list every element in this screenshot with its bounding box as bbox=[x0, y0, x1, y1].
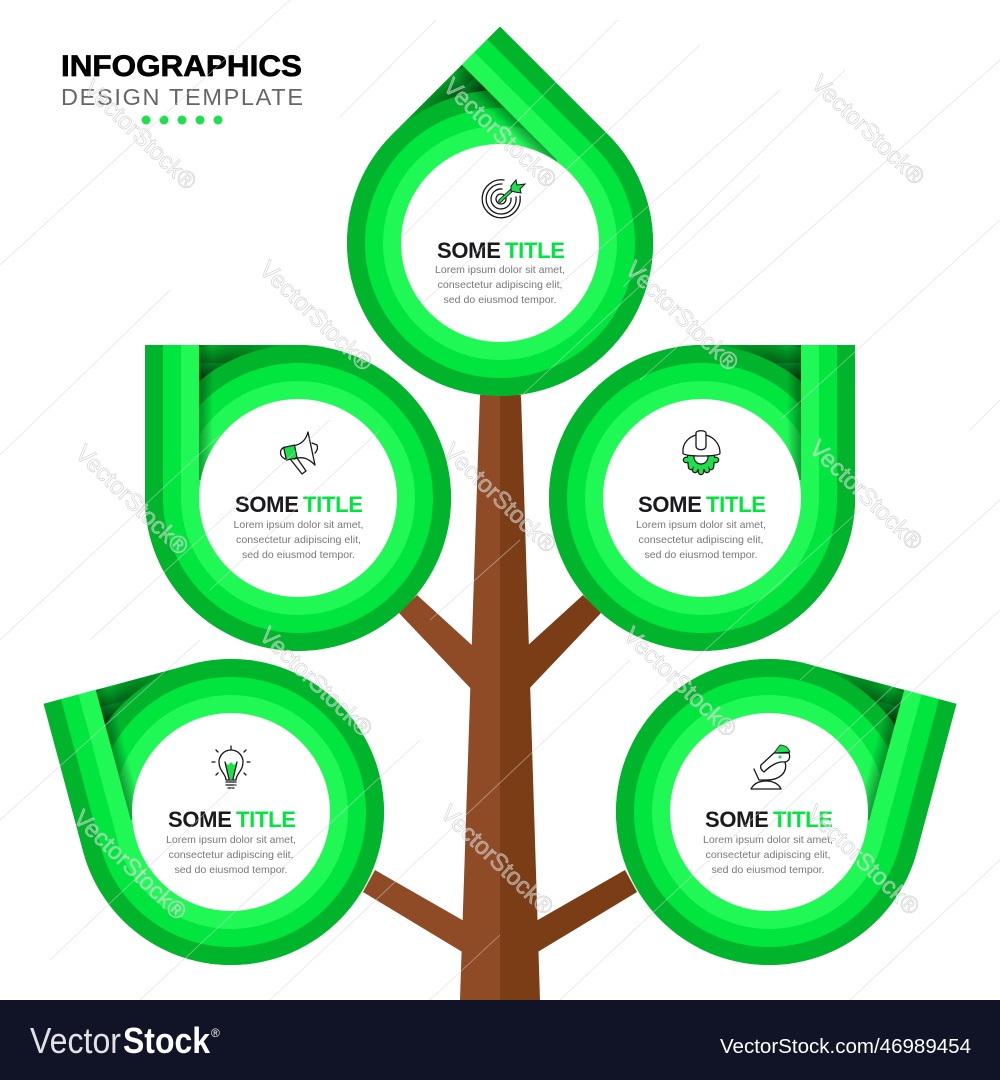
leaf shape: top bbox=[251, 0, 749, 492]
footer image id: VectorStock.com/46989454 bbox=[720, 1036, 971, 1058]
footer logo: ® bbox=[211, 1026, 220, 1040]
heading: bottom right title: SOME bbox=[705, 807, 769, 832]
text block: middle left body bbox=[234, 519, 364, 561]
heading: bottom left title: SOME bbox=[168, 807, 232, 832]
heading: infographics: INFOGRAPHICS bbox=[61, 50, 302, 83]
text block: bottom right body bbox=[703, 834, 833, 876]
trunk: right half bbox=[500, 395, 540, 1000]
heading: middle left title: TITLE bbox=[303, 492, 363, 517]
heading: bottom right title: TITLE bbox=[773, 807, 833, 832]
text block: bottom right body: Lorem ipsum dolor sit amet, bbox=[703, 834, 833, 846]
watermarks: VectorStock® bbox=[618, 622, 742, 743]
watermarks: VectorStock® bbox=[620, 256, 744, 377]
icon: megaphone bbox=[280, 432, 317, 474]
leaf shape: middle left bbox=[122, 322, 474, 674]
text block: top leaf body: Lorem ipsum dolor sit amet, bbox=[435, 264, 565, 276]
text block: bottom right body: consectetur adipiscing elit, bbox=[706, 849, 830, 861]
watermarks: VectorStock® bbox=[78, 75, 202, 196]
title block bbox=[61, 50, 303, 124]
leaf shape: bottom right bbox=[553, 596, 985, 1028]
tree: trunk and branches bbox=[363, 395, 637, 1000]
footer logo: Stock bbox=[123, 1020, 211, 1061]
heading: middle right title: SOME bbox=[638, 492, 702, 517]
text block: middle right body: sed do eiusmod tempor. bbox=[644, 549, 758, 561]
text block: middle right body bbox=[636, 519, 766, 561]
watermarks: VectorStock® bbox=[68, 805, 192, 926]
text block: middle left body: consectetur adipiscing elit, bbox=[236, 534, 361, 546]
text block: bottom left body bbox=[166, 834, 296, 876]
leaf shape: middle right bbox=[526, 322, 878, 674]
panel: middle right leaf bbox=[526, 322, 878, 674]
text block: top leaf body: sed do eiusmod tempor. bbox=[444, 294, 556, 306]
text block: middle right body: Lorem ipsum dolor sit amet, bbox=[636, 519, 766, 531]
text block: middle right body: consectetur adipiscing elit, bbox=[638, 534, 764, 546]
watermarks bbox=[68, 70, 930, 926]
panel: bottom right leaf bbox=[553, 596, 985, 1028]
icon: light bulb bbox=[212, 746, 250, 788]
heading: middle left title: SOME bbox=[235, 492, 299, 517]
panel: middle left leaf bbox=[122, 322, 474, 674]
watermarks: VectorStock® bbox=[801, 800, 925, 921]
branch: upper left bbox=[399, 595, 474, 692]
dots bbox=[142, 116, 222, 124]
text block: bottom left body: consectetur adipiscing elit, bbox=[168, 849, 294, 861]
icon: helmet with gear bbox=[683, 431, 720, 472]
watermarks: VectorStock® bbox=[254, 622, 378, 743]
branch: lower right bbox=[536, 870, 637, 953]
footer logo: Vector bbox=[30, 1020, 121, 1061]
watermarks: VectorStock® bbox=[438, 73, 562, 194]
heading: middle right title: TITLE bbox=[706, 492, 766, 517]
panel: top leaf bbox=[251, 0, 749, 492]
trunk: left half bbox=[460, 395, 500, 1000]
watermarks: VectorStock® bbox=[70, 440, 194, 561]
icon: microscope bbox=[751, 745, 790, 789]
leaf shape: bottom left bbox=[15, 596, 447, 1028]
footer bar bbox=[0, 1000, 1000, 1080]
branch: upper right bbox=[526, 595, 601, 692]
watermarks: VectorStock® bbox=[438, 438, 562, 559]
text block: bottom right body: sed do eiusmod tempor. bbox=[712, 864, 824, 876]
branch: lower left bbox=[363, 870, 464, 953]
text block: middle left body: Lorem ipsum dolor sit amet, bbox=[234, 519, 364, 531]
text block: top leaf body bbox=[435, 264, 565, 306]
heading: bottom left title: TITLE bbox=[236, 807, 296, 832]
text block: top leaf body: consectetur adipiscing elit, bbox=[438, 279, 562, 291]
text block: bottom left body: Lorem ipsum dolor sit amet, bbox=[166, 834, 296, 846]
panel: bottom left leaf bbox=[15, 596, 447, 1028]
heading: top leaf title: TITLE bbox=[505, 238, 565, 263]
watermarks: VectorStock® bbox=[435, 800, 559, 921]
text block: middle left body: sed do eiusmod tempor. bbox=[242, 549, 355, 561]
watermarks: VectorStock® bbox=[806, 70, 930, 191]
icon: target with arrow bbox=[482, 180, 525, 218]
text block: bottom left body: sed do eiusmod tempor. bbox=[174, 864, 288, 876]
heading: top leaf title: SOME bbox=[437, 238, 501, 263]
watermarks: VectorStock® bbox=[804, 435, 928, 556]
subheading: design template: DESIGN TEMPLATE bbox=[61, 84, 303, 110]
watermarks: VectorStock® bbox=[254, 256, 378, 377]
